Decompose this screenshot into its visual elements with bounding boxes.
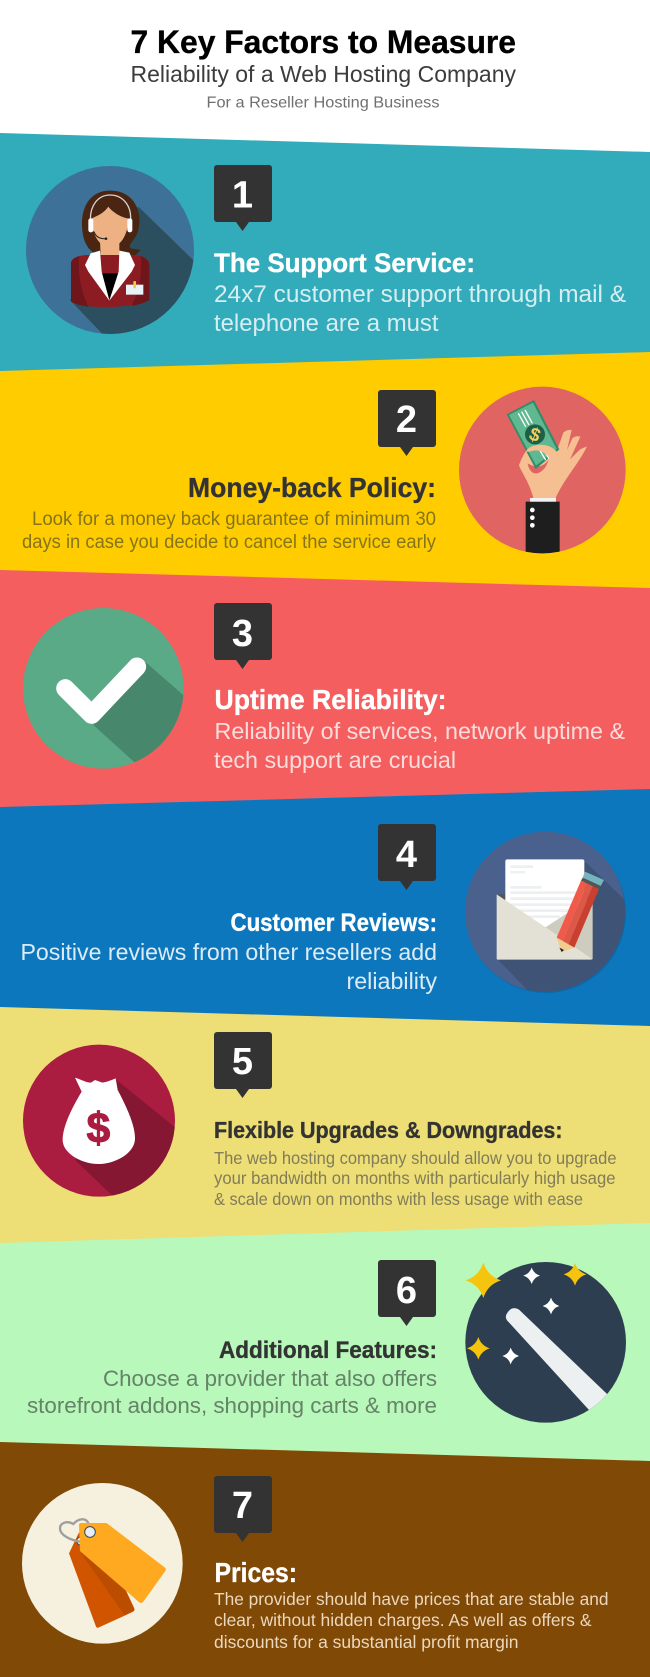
panel: 4 customer reviews	[0, 789, 650, 1027]
tagline: For a Reseller Hosting Business	[206, 94, 440, 112]
number badge 4	[378, 824, 436, 890]
description: storefront addons, shopping carts & more	[27, 1393, 437, 1418]
description	[214, 1148, 616, 1209]
icon: envelope and pencil	[465, 832, 628, 998]
description	[27, 1366, 437, 1418]
description: reliability	[346, 968, 437, 994]
description: days in case you decide to cancel the service early	[22, 532, 436, 553]
title: 7 Key Factors to Measure	[130, 24, 516, 60]
icon: money bag	[23, 1045, 182, 1198]
icon: hand with banknote: $	[526, 423, 544, 446]
number badge 5: 5	[232, 1041, 253, 1083]
panel: 7 prices	[0, 1442, 650, 1677]
panel: 2 money-back policy	[0, 352, 650, 589]
header: title block	[130, 24, 516, 112]
number badge 5	[214, 1032, 272, 1098]
heading: Money-back Policy:	[188, 472, 436, 503]
heading: Additional Features:	[219, 1337, 437, 1364]
description: discounts for a substantial profit margin	[214, 1632, 518, 1652]
description: Reliability of services, network uptime &	[214, 718, 625, 744]
heading: The Support Service:	[214, 248, 475, 278]
number badge 6	[378, 1260, 436, 1326]
number badge 3: 3	[232, 613, 253, 655]
icon: check mark	[23, 608, 185, 769]
icon: money bag: $	[86, 1105, 110, 1153]
panel: 6 additional features	[0, 1223, 650, 1462]
description: 24x7 customer support through mail &	[214, 281, 626, 308]
icon: support agent	[26, 166, 197, 340]
description: & scale down on months with less usage with ease	[214, 1189, 583, 1209]
number badge 7: 7	[232, 1485, 253, 1527]
description	[22, 509, 436, 553]
number badge 6: 6	[396, 1270, 417, 1312]
panel: 5 flexible upgrades	[0, 1007, 650, 1244]
heading: Uptime Reliability:	[214, 684, 446, 715]
description	[20, 939, 437, 994]
number badge 1: 1	[232, 174, 253, 216]
number badge 3	[214, 603, 272, 669]
description: telephone are a must	[214, 310, 439, 337]
icon: magic wand	[465, 1262, 626, 1423]
description: Look for a money back guarantee of minimum 30	[32, 509, 436, 530]
panel: 1 support service	[0, 133, 650, 372]
icon: price tags	[22, 1483, 183, 1644]
number badge 7	[214, 1476, 272, 1542]
description: clear, without hidden charges. As well as offers &	[214, 1610, 592, 1630]
number badge 2	[378, 390, 436, 456]
description: Choose a provider that also offers	[103, 1366, 437, 1391]
description: Positive reviews from other resellers add	[20, 939, 437, 965]
description: The provider should have prices that are stable and	[214, 1589, 608, 1609]
heading: Customer Reviews:	[230, 909, 437, 937]
description	[214, 718, 625, 773]
description: your bandwidth on months with particularly high usage	[214, 1168, 616, 1188]
heading: Prices:	[214, 1557, 297, 1588]
icon: hand with banknote	[459, 387, 626, 555]
description	[214, 1589, 608, 1652]
heading: Flexible Upgrades & Downgrades:	[214, 1117, 562, 1143]
number badge 2: 2	[396, 399, 417, 441]
number badge 4: 4	[396, 834, 417, 876]
panel: 3 uptime reliability	[0, 570, 650, 808]
description: tech support are crucial	[214, 747, 456, 773]
description: The web hosting company should allow you to upgrade	[214, 1148, 616, 1168]
number badge 1	[214, 165, 272, 231]
description	[214, 281, 626, 337]
subtitle: Reliability of a Web Hosting Company	[130, 61, 516, 87]
